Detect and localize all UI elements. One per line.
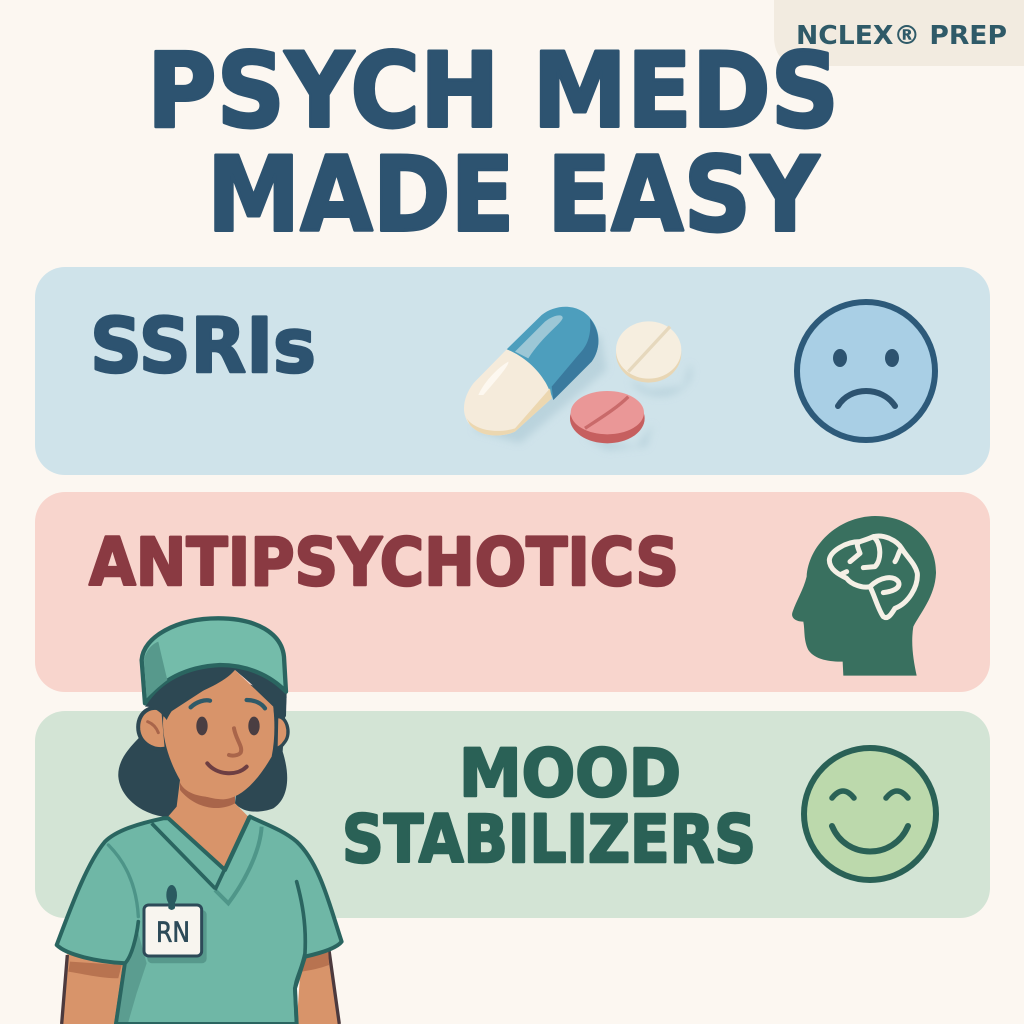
nurse illustration [57,618,342,1024]
icon: pills [464,307,692,450]
collar [215,827,262,903]
neck [167,780,248,870]
scrub top [57,817,342,1024]
heading: mood stabilizers: MOOD [459,735,681,812]
badge: NCLEX PREP [774,0,1024,66]
panel: SSRIs [35,267,990,475]
RN badge [144,885,207,963]
heading: mood stabilizers [342,735,756,878]
icon: sad face [797,302,935,440]
panel: mood stabilizers [35,711,990,918]
heading: mood stabilizers: STABILIZERS [342,801,756,878]
seams [108,845,138,917]
arms [62,948,340,1024]
panel: antipsychotics [35,492,990,692]
heading: SSRIs: SSRIs [90,301,316,390]
badge: NCLEX PREP: NCLEX® PREP [796,21,1007,51]
face [163,670,274,799]
ear [138,708,167,749]
eyebrows, eyes, nose, mouth [191,700,265,708]
RN badge: RN [156,917,190,948]
fringe hair [145,663,287,720]
icon: head with brain [792,516,936,676]
cap [142,618,286,703]
hair back [118,667,287,817]
title: PSYCH MEDS [147,32,839,152]
title [147,32,839,256]
heading: antipsychotics: ANTIPSYCHOTICS [89,524,679,601]
title: MADE EASY [207,136,820,256]
icon: smiling face [804,748,936,880]
